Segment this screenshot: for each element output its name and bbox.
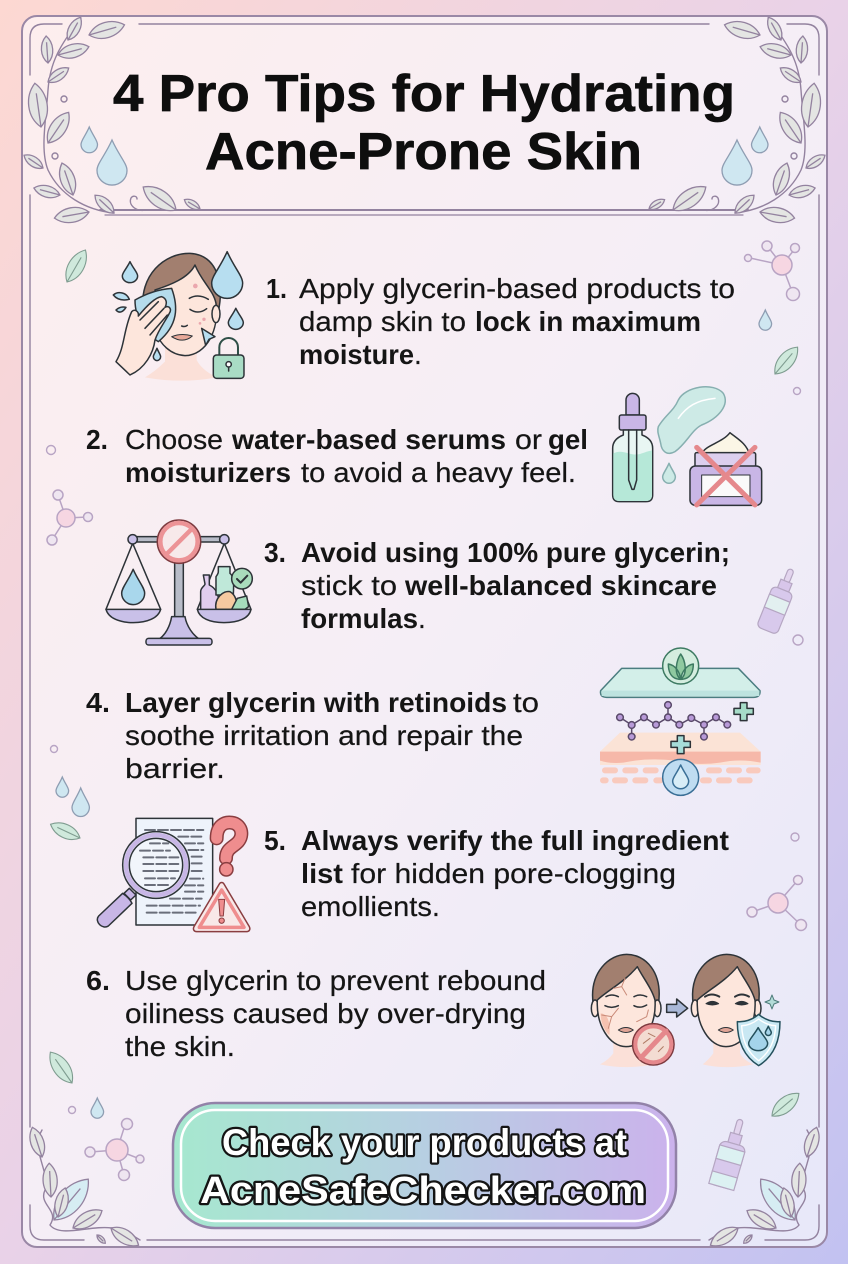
icon: dry cracked face becoming hydrated protected face: [591, 954, 780, 1067]
tip 6: the skin.: [125, 1031, 235, 1062]
tip 5: [264, 825, 729, 922]
tip 5: 5.: [264, 825, 286, 856]
icon: serum bottle, gel swatch and crossed-out cream jar: [613, 387, 762, 505]
tip 6: oiliness caused by over-drying: [125, 998, 526, 1029]
title: [113, 65, 735, 181]
tip 2: Choose: [125, 424, 223, 455]
tip 2: water-based serums: [231, 424, 506, 455]
tip 2: gel: [548, 424, 588, 455]
icon: balance scale with drop versus skincare products: [106, 520, 252, 645]
tip 3: 3.: [264, 537, 286, 568]
tip 3: Avoid using 100% pure glycerin;: [301, 537, 730, 568]
tip 4: [86, 687, 539, 784]
icon: woman pressing damp towel to face with lock: [113, 252, 244, 381]
title: Acne-Prone Skin: [205, 123, 642, 181]
call to action button: Check your products at: [222, 1122, 627, 1163]
tip 3: .: [418, 603, 426, 634]
icon: magnifier over ingredient list with warning signs: [97, 818, 250, 932]
decorative molecule: top right: [744, 241, 800, 300]
tip 2: moisturizers: [125, 457, 291, 488]
tip 1: damp skin to: [299, 306, 466, 337]
tip 1: Apply glycerin-based products to: [299, 273, 735, 304]
tip 1: lock in maximum: [475, 306, 701, 337]
tip 2: 2.: [86, 424, 108, 455]
tip 1: [266, 273, 735, 370]
tip 4: soothe irritation and repair the: [125, 720, 523, 751]
floral corner: bottom right: [707, 1125, 823, 1251]
title panel lower border: [100, 210, 748, 215]
title: 4 Pro Tips for Hydrating: [113, 65, 735, 123]
tip 6: Use glycerin to prevent rebound: [125, 965, 546, 996]
tip 3: formulas: [301, 603, 418, 634]
decorative serum bottle: bottom right: [709, 1116, 753, 1190]
decorative molecule: left: [47, 490, 92, 545]
decorative serum bottle: right: [756, 565, 802, 635]
decorative molecule: bottom left: [85, 1118, 144, 1180]
call to action button: [173, 1103, 676, 1228]
tip 3: [264, 537, 730, 634]
floral corner: top left: [21, 15, 202, 225]
decorative molecule: lower right: [747, 876, 806, 930]
tip 1: 1.: [266, 273, 287, 304]
tip 6: [86, 965, 546, 1062]
tip 3: stick to: [301, 570, 397, 601]
tip 5: list: [301, 858, 343, 889]
tip 6: 6.: [86, 965, 110, 996]
tip 2: to avoid a heavy feel.: [301, 457, 576, 488]
tip 2: [86, 424, 588, 488]
tip 4: barrier.: [125, 753, 225, 784]
icon: layered skin diagram with glycerin molecule: [600, 648, 761, 795]
tip 1: moisture: [299, 339, 414, 370]
floral corner: bottom left: [26, 1125, 142, 1251]
tip 4: to: [513, 687, 539, 718]
floral corner: top right: [647, 15, 828, 225]
tip 5: emollients.: [301, 891, 440, 922]
tip 5: Always verify the full ingredient: [301, 825, 729, 856]
call to action button: AcneSafeChecker.com: [200, 1170, 646, 1212]
tip 3: well-balanced skincare: [404, 570, 717, 601]
decorative leaves, drops and dots: [44, 246, 804, 1122]
tip 4: Layer glycerin with retinoids: [125, 687, 507, 718]
tip 5: for hidden pore-clogging: [351, 858, 676, 889]
tip 4: 4.: [86, 687, 110, 718]
tip 2: or: [515, 424, 542, 455]
tip 1: .: [414, 339, 422, 370]
